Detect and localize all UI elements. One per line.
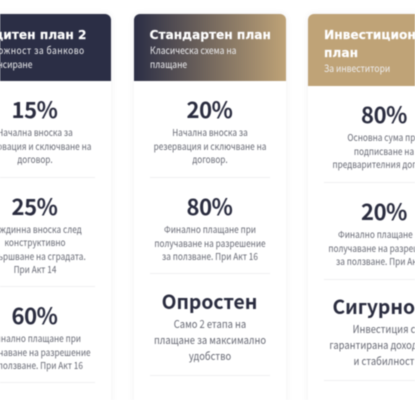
- plan subtitle: Класическа схема на: [150, 42, 236, 57]
- description: 80%: подписване на: [354, 144, 414, 158]
- description: simplified: удобство: [188, 348, 231, 364]
- description: 80%: получаване на разрешение: [154, 236, 265, 250]
- plan title: Стандартен план: [150, 28, 271, 42]
- description: 25%: [0, 222, 86, 276]
- stat: simplified: Опростен: [162, 287, 257, 315]
- description: 15%: [0, 125, 92, 166]
- plan subtitle: [150, 42, 236, 71]
- description: 60%: [0, 331, 91, 372]
- stat: 60%: 60%: [12, 299, 57, 331]
- stat: 15%: 15%: [12, 93, 57, 125]
- description: 15%: договор.: [17, 152, 52, 166]
- description: 80%: [332, 130, 415, 171]
- description: 20%: Начална вноска за: [172, 125, 247, 139]
- panel: investment plan: [308, 14, 415, 400]
- description: 25%: конструктивно: [4, 235, 65, 249]
- description: simplified: плащане за максимално: [153, 332, 266, 348]
- description: 20%: [153, 125, 266, 166]
- description: simplified: [153, 316, 266, 364]
- header: standard plan: [134, 14, 286, 81]
- panel: credit plan 2: [0, 14, 110, 400]
- plan title: [324, 28, 415, 60]
- header: credit plan 2: [0, 14, 110, 81]
- stat: 80%: 80%: [361, 98, 407, 130]
- stat: 80%: 80%: [187, 190, 232, 222]
- plan subtitle: [0, 42, 84, 71]
- description: 80%: Финално плащане при: [163, 222, 256, 236]
- description: security: Инвестиция с: [353, 321, 415, 337]
- description: security: [329, 321, 415, 369]
- description: 20%: [328, 227, 415, 268]
- stat: 20%: 20%: [187, 93, 232, 125]
- description: 80%: [154, 222, 266, 263]
- description: 80%: за ползване. При Акт 16: [162, 249, 257, 263]
- plan title: план: [324, 46, 358, 60]
- description: security: и стабилност: [354, 353, 414, 369]
- description: simplified: Само 2 етапа на: [173, 316, 246, 332]
- header: investment plan: [308, 14, 415, 86]
- plan subtitle: плащане: [150, 56, 187, 71]
- description: 20%: договор.: [192, 152, 227, 166]
- stat: 20%: 20%: [361, 195, 407, 227]
- description: 25%: При Акт 14: [13, 262, 56, 276]
- description: 20%: резервация и сключване на: [153, 138, 266, 152]
- plan subtitle: За инвеститори: [324, 60, 390, 75]
- panel: standard plan: [134, 14, 286, 400]
- stat: 25%: 25%: [12, 190, 57, 222]
